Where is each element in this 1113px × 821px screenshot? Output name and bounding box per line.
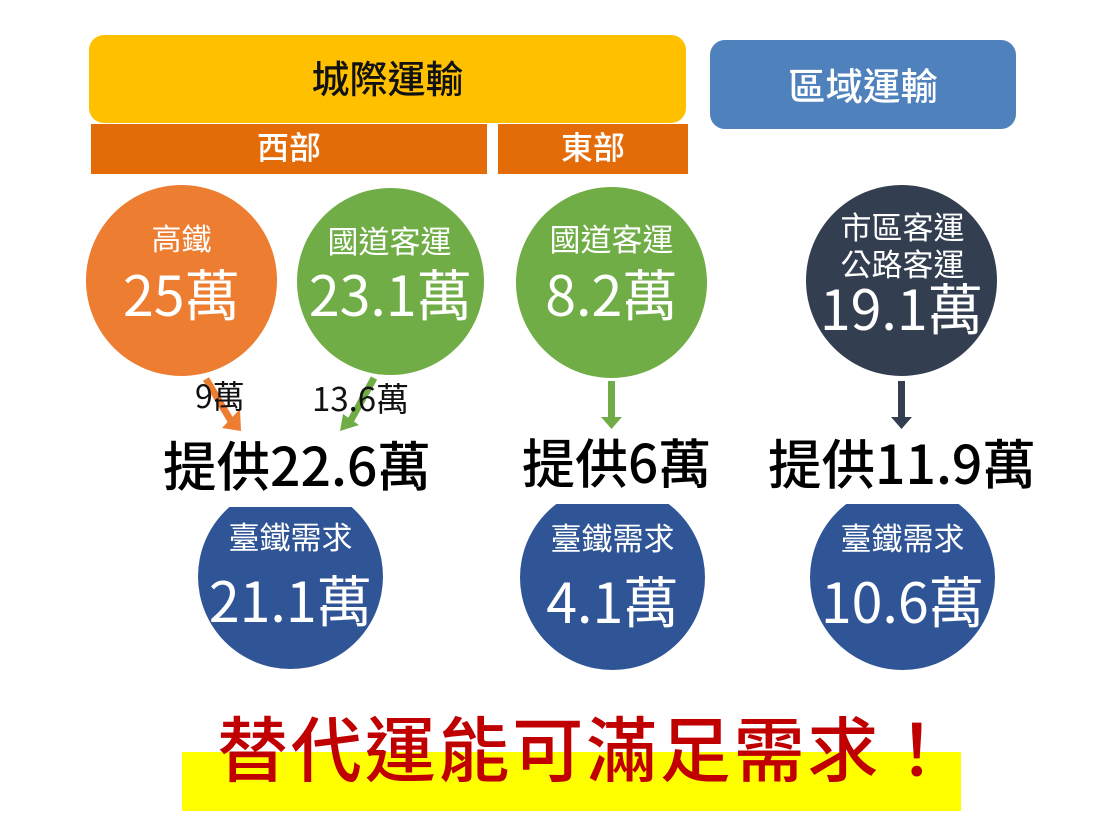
sub-header: west: 西部: [257, 123, 321, 169]
header: intercity transport: [89, 35, 686, 123]
circle: west highway bus: 國道客運: [328, 217, 452, 262]
circle: west TRA demand: 臺鐵需求: [228, 513, 352, 558]
circle: city and road bus: 公路客運: [840, 240, 964, 285]
circle: east highway bus: 國道客運: [550, 215, 674, 260]
circle: regional TRA demand: 臺鐵需求: [840, 514, 964, 559]
supply: regional: 提供11.9萬: [768, 423, 1036, 500]
header: intercity transport: 城際運輸: [311, 49, 464, 104]
circle: west highway bus: 23.1萬: [309, 252, 472, 332]
circle: high speed rail: 25萬: [123, 252, 240, 332]
circle: east highway bus: 8.2萬: [545, 252, 678, 332]
supply: west: 提供22.6萬: [163, 425, 431, 502]
sub-header: east: 東部: [561, 123, 625, 169]
circle: east TRA demand: [520, 504, 705, 670]
circle: high speed rail: 高鐵: [152, 215, 212, 259]
circle: city and road bus: 19.1萬: [820, 266, 983, 346]
conclusion headline: 替代運能可滿足需求！: [217, 695, 955, 797]
label: 13.6萬: 13.6萬: [312, 373, 409, 421]
circle: city and road bus: 市區客運: [840, 203, 964, 248]
circle: east TRA demand: 4.1萬: [546, 559, 679, 639]
circle: high speed rail: [86, 185, 277, 376]
circle: west TRA demand: [198, 507, 383, 669]
circle: west highway bus: [297, 188, 484, 375]
circle: west TRA demand: 21.1萬: [209, 558, 372, 638]
supply: east: 提供6萬: [522, 423, 711, 499]
circle: east TRA demand: 臺鐵需求: [550, 514, 674, 559]
header: regional transport: 區域運輸: [788, 56, 938, 111]
circle: regional TRA demand: [810, 504, 995, 670]
sub-header: east: [498, 124, 688, 174]
circle: city and road bus: [806, 185, 997, 376]
label: 9萬: 9萬: [195, 372, 245, 418]
circle: regional TRA demand: 10.6萬: [821, 559, 984, 639]
highlight bar: [182, 752, 961, 811]
sub-header: west: [91, 124, 487, 174]
header: regional transport: [710, 40, 1016, 129]
circle: east highway bus: [516, 187, 707, 378]
